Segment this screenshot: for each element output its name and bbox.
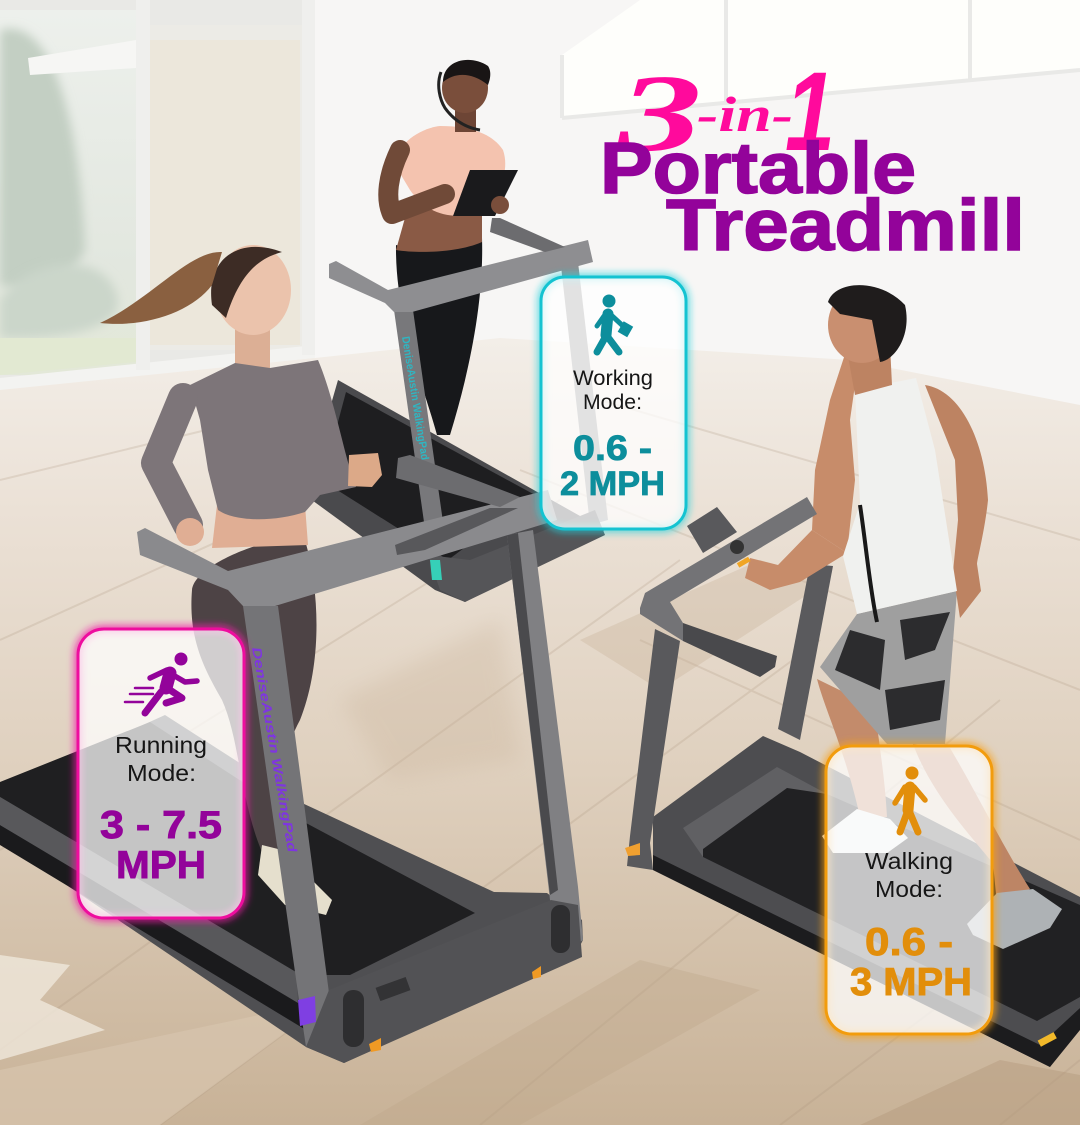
base housing face bbox=[306, 900, 582, 1063]
man: walking bbox=[745, 285, 1062, 949]
text: working mode label bbox=[573, 367, 653, 414]
display bbox=[395, 508, 518, 555]
yellow label bbox=[1038, 1032, 1057, 1047]
text: working mode label: Working bbox=[573, 367, 653, 390]
text: walking mode label: Mode: bbox=[875, 876, 943, 902]
left upright bbox=[243, 606, 337, 1047]
rear belt bbox=[322, 392, 535, 560]
front rail bbox=[0, 797, 298, 1003]
rear brand text: DeniseAustin WalkingPad bbox=[399, 336, 430, 461]
rear handlebar bbox=[329, 240, 593, 312]
front deck bbox=[0, 715, 583, 1063]
woman: running bbox=[100, 245, 382, 915]
text: walking mode speed: 3 MPH bbox=[850, 961, 972, 1004]
rear deck bbox=[305, 380, 605, 602]
woman: working bbox=[388, 60, 518, 435]
right upright bbox=[507, 530, 583, 950]
front belt bbox=[0, 722, 475, 975]
text: working mode speed: 0.6 - bbox=[573, 429, 652, 468]
tablet holder bbox=[687, 507, 737, 553]
console bar bbox=[640, 497, 817, 641]
left upright bbox=[627, 629, 680, 870]
rear uprights bbox=[394, 310, 443, 522]
right upright bbox=[778, 564, 833, 740]
orange knob bbox=[625, 843, 640, 856]
console knob bbox=[730, 540, 744, 554]
text: running mode speed bbox=[100, 804, 222, 887]
icon: walker with briefcase bbox=[597, 294, 633, 352]
rear base bbox=[428, 510, 605, 602]
front black side bbox=[0, 825, 306, 1030]
rear handle bbox=[396, 455, 520, 507]
text: walking mode label bbox=[865, 848, 953, 902]
text: walking mode speed bbox=[850, 921, 972, 1004]
side handle bbox=[683, 623, 777, 677]
text: working mode speed: 2 MPH bbox=[560, 465, 665, 503]
callout: working mode bbox=[541, 277, 686, 529]
title: Treadmill: Treadmill bbox=[666, 186, 1025, 266]
text: running mode label bbox=[115, 732, 207, 786]
text: walking mode speed: 0.6 - bbox=[865, 921, 953, 964]
icon: walker bbox=[895, 766, 925, 832]
treadmill: right (walking mode) bbox=[625, 285, 1080, 1067]
right belt surround bbox=[683, 767, 840, 860]
text: running mode speed: 3 - 7.5 bbox=[100, 804, 222, 847]
window: upper right bbox=[562, 0, 1080, 118]
orange feet bbox=[369, 966, 541, 1052]
text: running mode label: Mode: bbox=[127, 760, 196, 786]
brand text on upright: DeniseAustin WalkingPad bbox=[249, 646, 300, 855]
title: 3-in-1 script: 1 bbox=[785, 49, 835, 174]
callout: running mode bbox=[78, 629, 244, 918]
window: garden left bbox=[0, 0, 315, 392]
right deck black side bbox=[653, 855, 1080, 1067]
right belt bbox=[703, 788, 1080, 1021]
slot right bbox=[551, 905, 570, 953]
slot left bbox=[343, 990, 364, 1047]
wood floor bbox=[0, 338, 1080, 1125]
treadmill: rear (working mode) bbox=[305, 60, 608, 602]
text: running mode speed: MPH bbox=[116, 844, 206, 887]
text: working mode speed bbox=[560, 429, 665, 503]
console orange key bbox=[737, 557, 751, 568]
title: Portable: Portable bbox=[600, 129, 916, 209]
title: 3-in-1 script bbox=[616, 49, 835, 174]
right deck bbox=[653, 736, 1080, 1067]
title: 3-in-1 script: 3 bbox=[616, 52, 702, 174]
text: running mode label: Running bbox=[115, 732, 207, 758]
right upright dark strip bbox=[507, 533, 558, 895]
ports bbox=[376, 977, 410, 1001]
icon: runner bbox=[125, 652, 197, 713]
treadmill: front (running mode) bbox=[0, 245, 583, 1063]
text: walking mode label: Walking bbox=[865, 848, 953, 874]
title: 3-in-1 script: -in- bbox=[697, 86, 793, 142]
callout: walking mode bbox=[826, 746, 992, 1034]
purple knob bbox=[298, 996, 316, 1026]
text: working mode label: Mode: bbox=[583, 391, 642, 414]
front handlebar bbox=[137, 490, 557, 606]
